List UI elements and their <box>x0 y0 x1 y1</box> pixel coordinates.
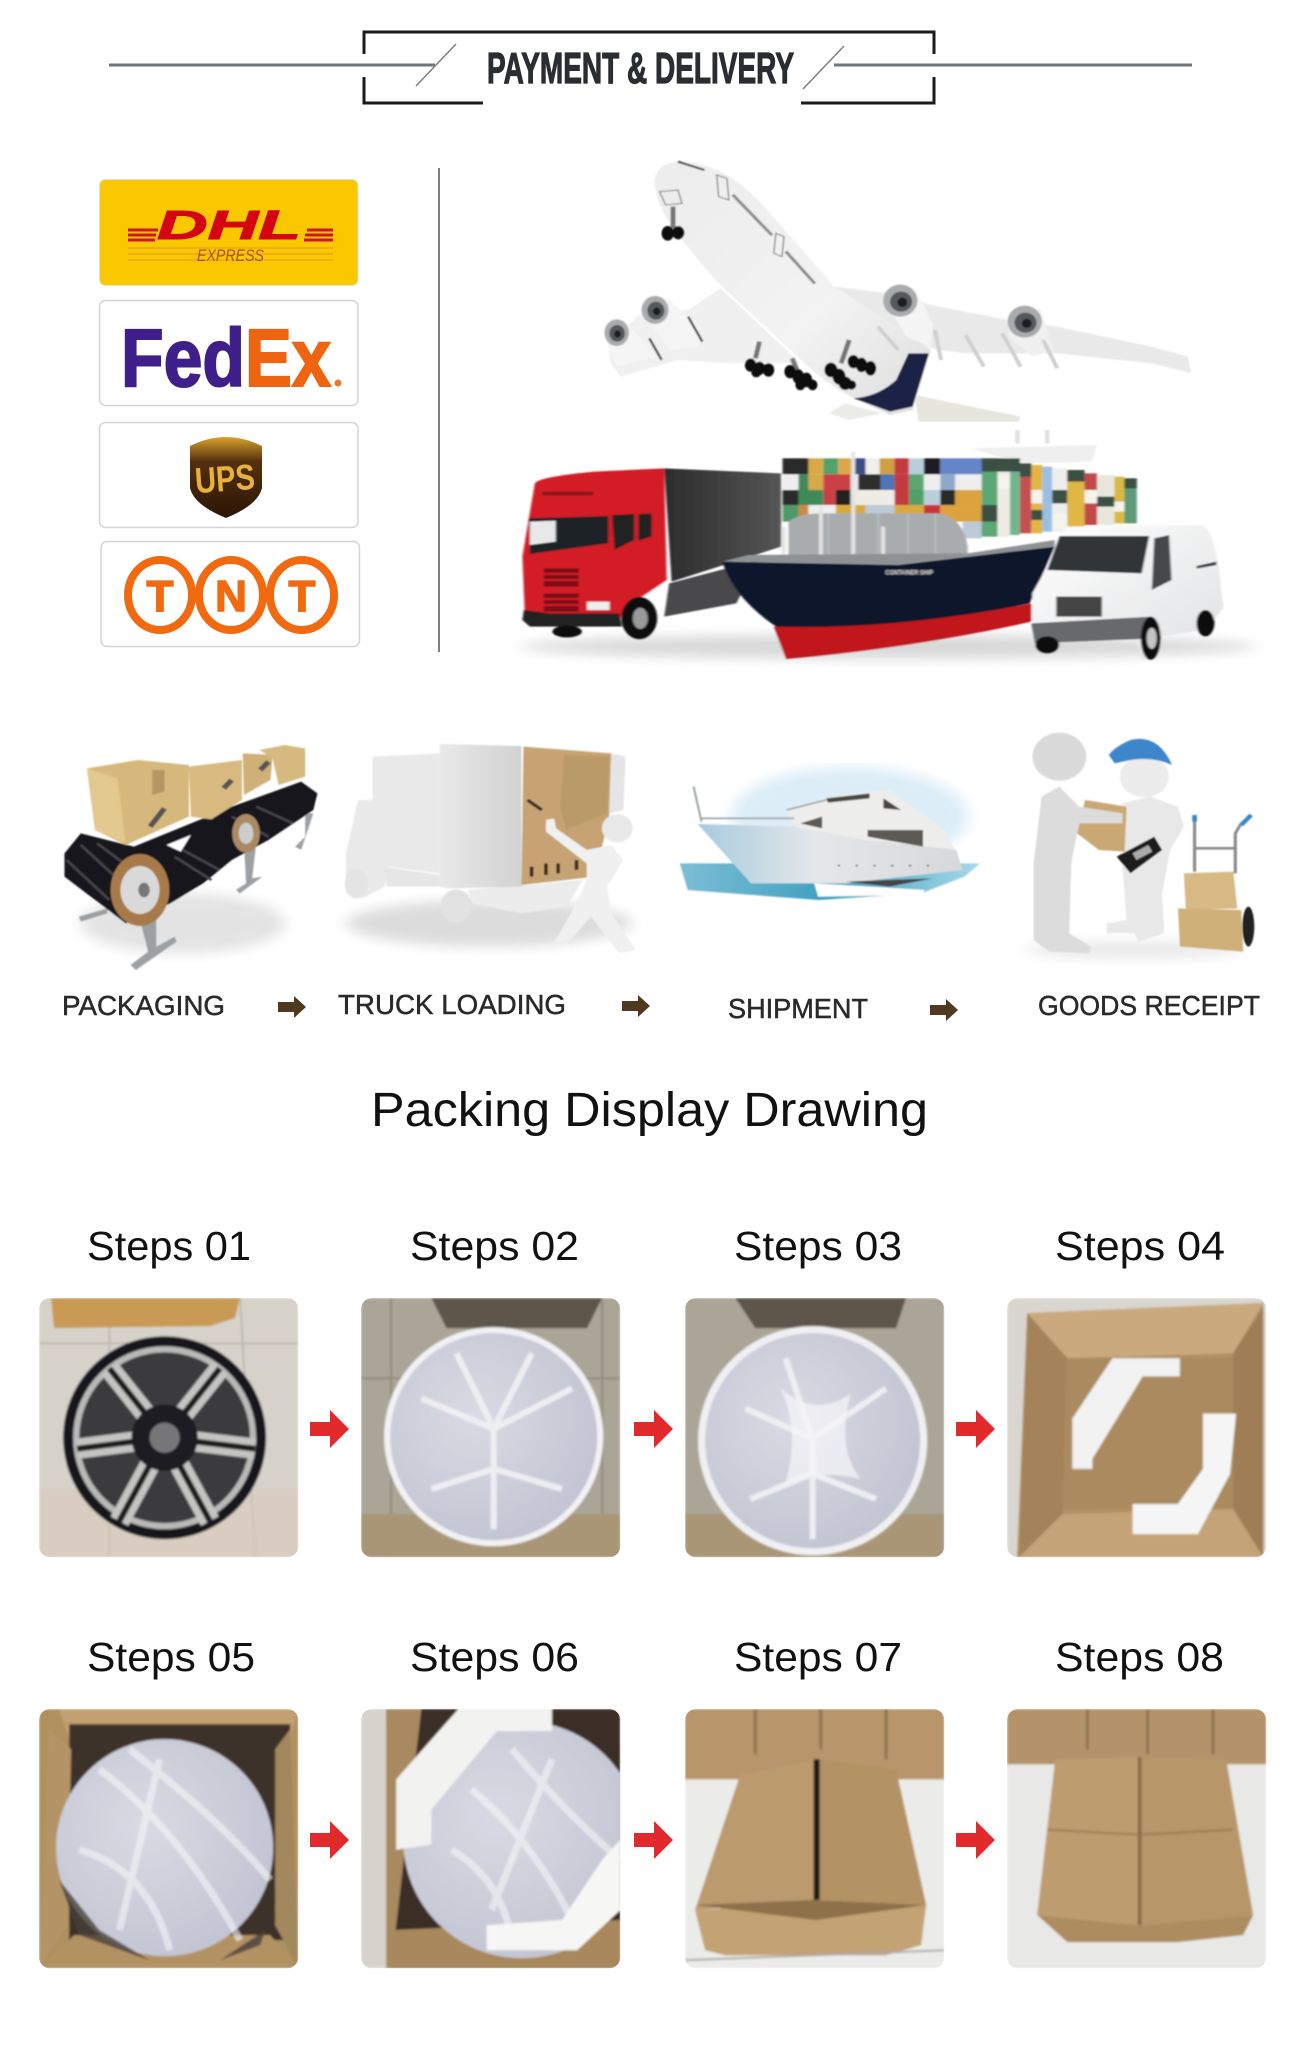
cargo ship: CONTAINER SHIP <box>886 568 933 576</box>
step labels row 1 <box>87 1223 1225 1269</box>
step labels row 2 <box>87 1634 1224 1680</box>
process illustrations <box>64 733 1254 970</box>
arrow <box>930 999 958 1021</box>
arrow <box>310 1821 349 1859</box>
arrow <box>278 996 306 1018</box>
photo: step 7 box with open flaps <box>685 1709 944 1968</box>
step labels row 2: Steps 06 <box>410 1634 579 1680</box>
arrow <box>956 1821 995 1859</box>
step labels row 1: Steps 03 <box>734 1223 902 1269</box>
label: truck loading: TRUCK LOADING <box>338 989 566 1020</box>
photo: step 3 plastic wrapped wheel <box>685 1298 944 1557</box>
truck loading <box>345 744 636 953</box>
arrow <box>634 1410 673 1448</box>
arrow <box>634 1821 673 1859</box>
header slashes <box>416 44 844 89</box>
plane <box>604 162 1191 422</box>
label: shipment: SHIPMENT <box>728 993 868 1024</box>
goods receipt <box>1024 733 1254 958</box>
containers <box>783 458 1137 538</box>
white van <box>1031 525 1224 660</box>
yacht <box>680 767 980 900</box>
logo card: DHL <box>100 180 358 286</box>
photo: step 2 foam wrapped wheel <box>361 1298 620 1557</box>
cargo ship <box>722 430 1137 659</box>
truck <box>522 468 781 640</box>
section header: payment and delivery <box>109 32 1192 103</box>
logo card: TNT: T <box>289 572 316 621</box>
ground shadow <box>520 635 1256 659</box>
header side rules <box>109 64 1192 66</box>
step labels row 1: Steps 04 <box>1055 1223 1225 1269</box>
courier logos column <box>100 180 360 646</box>
step labels row 1: Steps 01 <box>87 1223 251 1269</box>
step labels row 2: Steps 05 <box>87 1634 255 1680</box>
truck, ship and van <box>520 430 1256 660</box>
photo: step 1 bare wheel <box>39 1298 298 1557</box>
step labels row 2: Steps 07 <box>734 1634 902 1680</box>
photo: step 5 wrapped wheel in box <box>39 1709 298 1968</box>
logo card: FedEx <box>100 300 358 406</box>
process labels <box>62 989 1260 1024</box>
photo: step 6 foam corners over wheel <box>361 1709 640 1968</box>
step labels row 2: Steps 08 <box>1055 1634 1224 1680</box>
packaging conveyor <box>64 745 317 970</box>
transport illustration <box>520 162 1256 660</box>
logo card: DHL: EXPRESS <box>197 246 265 265</box>
logo card: TNT: T <box>147 572 174 621</box>
heading: packing display drawing: Packing Display Drawing <box>371 1084 928 1137</box>
header frame <box>364 32 934 103</box>
arrow <box>310 1410 349 1448</box>
header title: PAYMENT & DELIVERY <box>487 44 794 93</box>
photo: step 8 closed box <box>1007 1709 1266 1968</box>
arrow <box>622 995 650 1017</box>
step labels row 1: Steps 02 <box>410 1223 579 1269</box>
logo card: UPS <box>100 422 358 528</box>
logo card: TNT: N <box>215 572 247 621</box>
logo card: UPS: UPS <box>194 456 256 501</box>
logo card: TNT <box>101 542 360 646</box>
logo card: FedEx: Ex <box>245 313 331 404</box>
label: goods receipt: GOODS RECEIPT <box>1038 990 1260 1021</box>
arrow <box>956 1410 995 1448</box>
label: packaging: PACKAGING <box>62 990 225 1021</box>
logo card: DHL: DHL <box>157 202 301 248</box>
photo: step 4 open box with foam corners <box>1007 1298 1266 1557</box>
logo card: FedEx: Fed <box>121 313 245 404</box>
